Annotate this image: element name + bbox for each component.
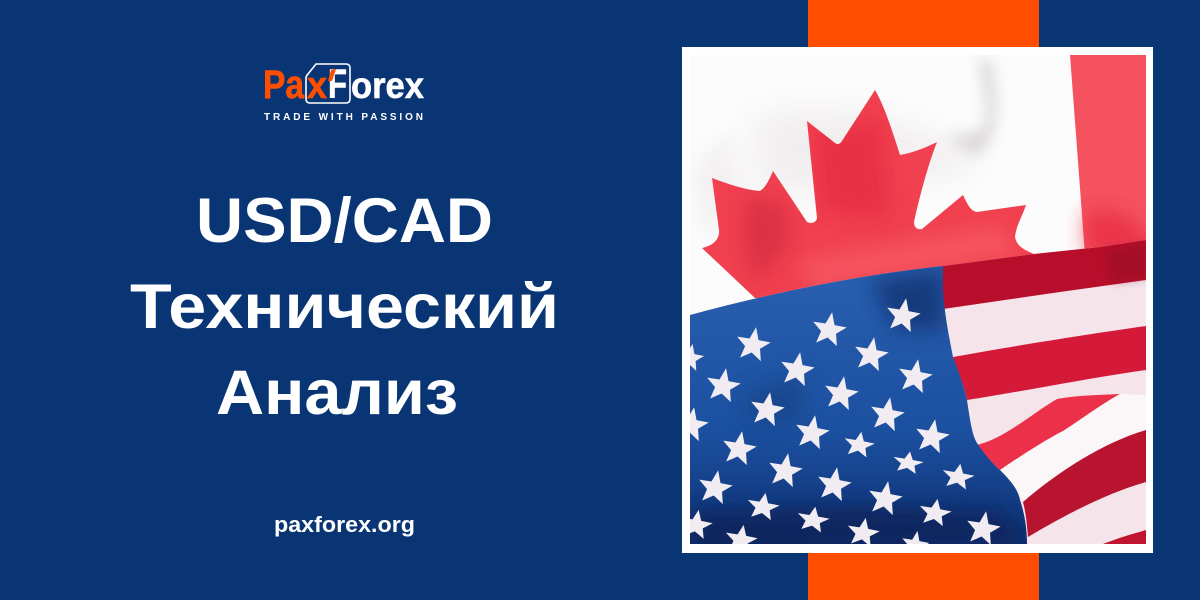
orange vertical band: [808, 0, 1039, 600]
US flag stripes: [758, 240, 1146, 544]
US canton: [690, 266, 1027, 544]
logo mark box: [306, 64, 350, 103]
maple leaf: [695, 85, 1040, 305]
stars: [690, 298, 1001, 544]
title: USD/CAD: [196, 186, 493, 256]
photo frame: [682, 47, 1153, 553]
logo accent tick: [328, 69, 336, 81]
logo wordmark: [263, 61, 424, 107]
logo: [263, 61, 424, 123]
logo wordmark: x: [307, 65, 327, 107]
title: [130, 186, 559, 428]
logo wordmark: orex: [351, 65, 424, 106]
website url: paxforex.org: [274, 512, 415, 537]
logo wordmark: Pa: [263, 63, 305, 107]
title: Анализ: [216, 358, 458, 428]
logo tagline: TRADE WITH PASSION: [264, 112, 423, 123]
title: Технический: [130, 272, 559, 342]
Canadian red bar: [1070, 55, 1146, 255]
photo: Canadian and US flags: [672, 55, 1146, 560]
logo wordmark: F: [328, 61, 347, 107]
Canadian flag field: [691, 55, 1004, 229]
